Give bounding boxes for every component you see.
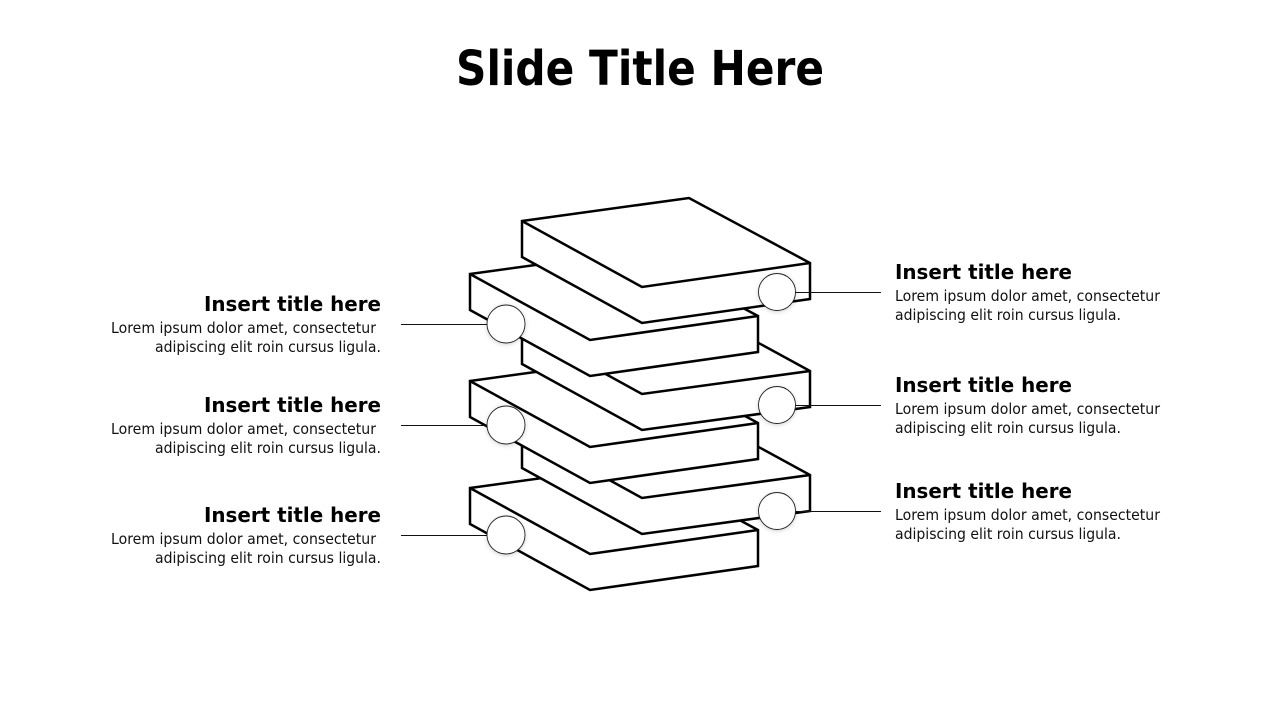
callout body: Lorem ipsum dolor amet, consectetur xyxy=(895,506,1161,524)
callout: left top xyxy=(111,292,381,356)
callout body: adipiscing elit roin cursus ligula. xyxy=(155,549,381,567)
stacked blocks diagram xyxy=(470,198,810,590)
callout body: adipiscing elit roin cursus ligula. xyxy=(895,525,1121,543)
callout: left bottom xyxy=(111,503,381,567)
callout heading: Insert title here xyxy=(895,260,1072,284)
callout heading: Insert title here xyxy=(204,292,381,316)
marker: left bottom xyxy=(401,516,525,554)
callout body: Lorem ipsum dolor amet, consectetur xyxy=(111,420,377,438)
marker: right top xyxy=(758,274,881,310)
callout body xyxy=(111,530,381,567)
block: right top xyxy=(522,198,810,323)
callout body xyxy=(895,400,1161,437)
callout body: Lorem ipsum dolor amet, consectetur xyxy=(111,319,377,337)
callout heading: Insert title here xyxy=(204,503,381,527)
callout body xyxy=(895,287,1161,324)
callout heading: Insert title here xyxy=(204,393,381,417)
callout body: adipiscing elit roin cursus ligula. xyxy=(155,338,381,356)
callout body: Lorem ipsum dolor amet, consectetur xyxy=(895,400,1161,418)
callout body: Lorem ipsum dolor amet, consectetur xyxy=(111,530,377,548)
block: right middle xyxy=(522,305,810,430)
callout: left middle xyxy=(111,393,381,457)
callout body xyxy=(111,319,381,356)
callout: right bottom xyxy=(895,479,1161,543)
block: left middle xyxy=(470,358,758,483)
marker: left top xyxy=(401,305,525,343)
block: right bottom xyxy=(522,409,810,534)
callout body xyxy=(111,420,381,457)
callout body: adipiscing elit roin cursus ligula. xyxy=(895,306,1121,324)
marker: right middle xyxy=(758,386,881,424)
callout: right middle xyxy=(895,373,1161,437)
callout heading: Insert title here xyxy=(895,479,1072,503)
callout body: adipiscing elit roin cursus ligula. xyxy=(155,439,381,457)
block: left bottom xyxy=(470,465,758,590)
callout: right top xyxy=(895,260,1161,324)
marker: right bottom xyxy=(758,492,881,530)
callout body xyxy=(895,506,1161,543)
callout body: Lorem ipsum dolor amet, consectetur xyxy=(895,287,1161,305)
title: Slide Title Here xyxy=(456,41,824,97)
marker: left middle xyxy=(401,406,525,444)
block: left top xyxy=(470,251,758,376)
callout heading: Insert title here xyxy=(895,373,1072,397)
callout body: adipiscing elit roin cursus ligula. xyxy=(895,419,1121,437)
